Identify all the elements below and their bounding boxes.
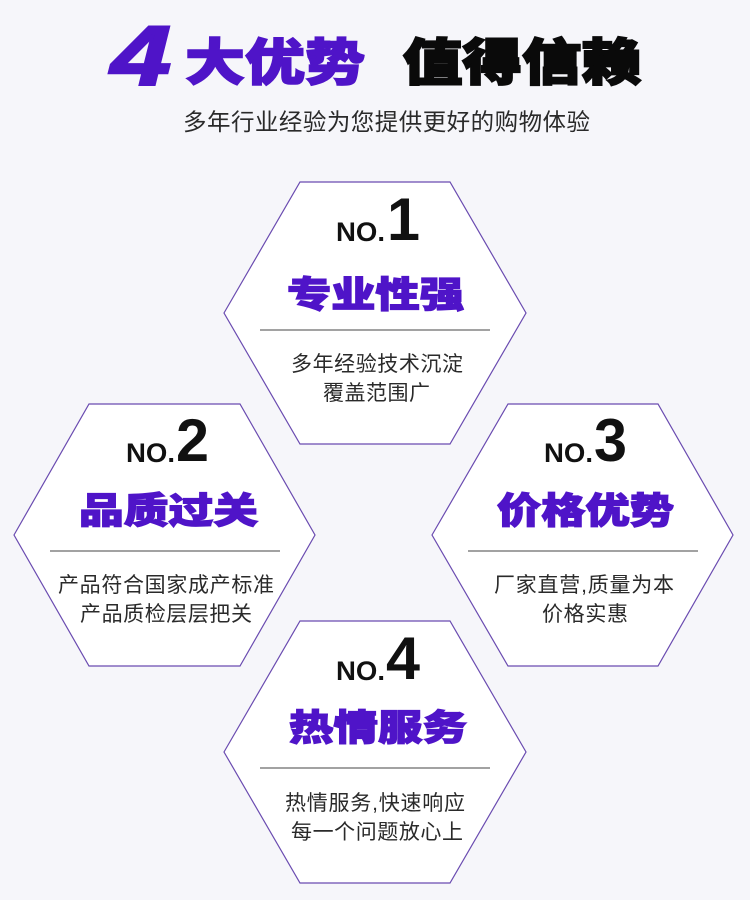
description 3 (494, 574, 674, 626)
heading 3: 价格优势 (497, 490, 674, 531)
number 3: NO. (544, 438, 593, 468)
title (108, 9, 641, 103)
title: black part: 值得信赖 (403, 35, 641, 91)
subtitle: 多年行业经验为您提供更好的购物体验 (183, 109, 590, 135)
number 3: 3 (594, 407, 627, 474)
hexagon 2 (14, 404, 315, 666)
description 4: 热情服务,快速响应 (285, 792, 465, 815)
description 3: 价格实惠 (542, 603, 628, 626)
number 1 (336, 186, 420, 253)
description 2 (58, 574, 274, 626)
title: purple part: 大优势 (185, 35, 365, 91)
number 1: 1 (387, 186, 420, 253)
description 1 (291, 353, 463, 405)
description 4 (285, 792, 465, 844)
description 1: 覆盖范围广 (323, 382, 430, 405)
heading 4: 热情服务 (289, 707, 467, 748)
panel: NO.2 (14, 404, 315, 666)
number 2 (126, 407, 209, 474)
heading 2: 品质过关 (79, 490, 258, 531)
title: purple part: 4 (108, 9, 171, 103)
panel: NO.1 (224, 182, 526, 444)
panel: NO.4 (224, 621, 526, 883)
hexagon 4 (224, 621, 526, 883)
description 4: 每一个问题放心上 (291, 821, 463, 844)
number 2: NO. (126, 438, 175, 468)
title: purple part (108, 9, 365, 103)
description 2: 产品符合国家成产标准 (58, 574, 274, 597)
number 4: NO. (336, 656, 385, 686)
hexagon 3 (432, 404, 733, 666)
number 3 (544, 407, 627, 474)
panel: NO.3 (432, 404, 733, 666)
number 2: 2 (176, 407, 209, 474)
number 4: 4 (386, 625, 421, 692)
description 1: 多年经验技术沉淀 (291, 353, 463, 376)
hexagon 1 (224, 182, 526, 444)
number 1: NO. (336, 217, 385, 247)
number 4 (336, 625, 421, 692)
description 3: 厂家直营,质量为本 (494, 574, 674, 597)
heading 1: 专业性强 (287, 274, 464, 315)
description 2: 产品质检层层把关 (80, 603, 252, 626)
